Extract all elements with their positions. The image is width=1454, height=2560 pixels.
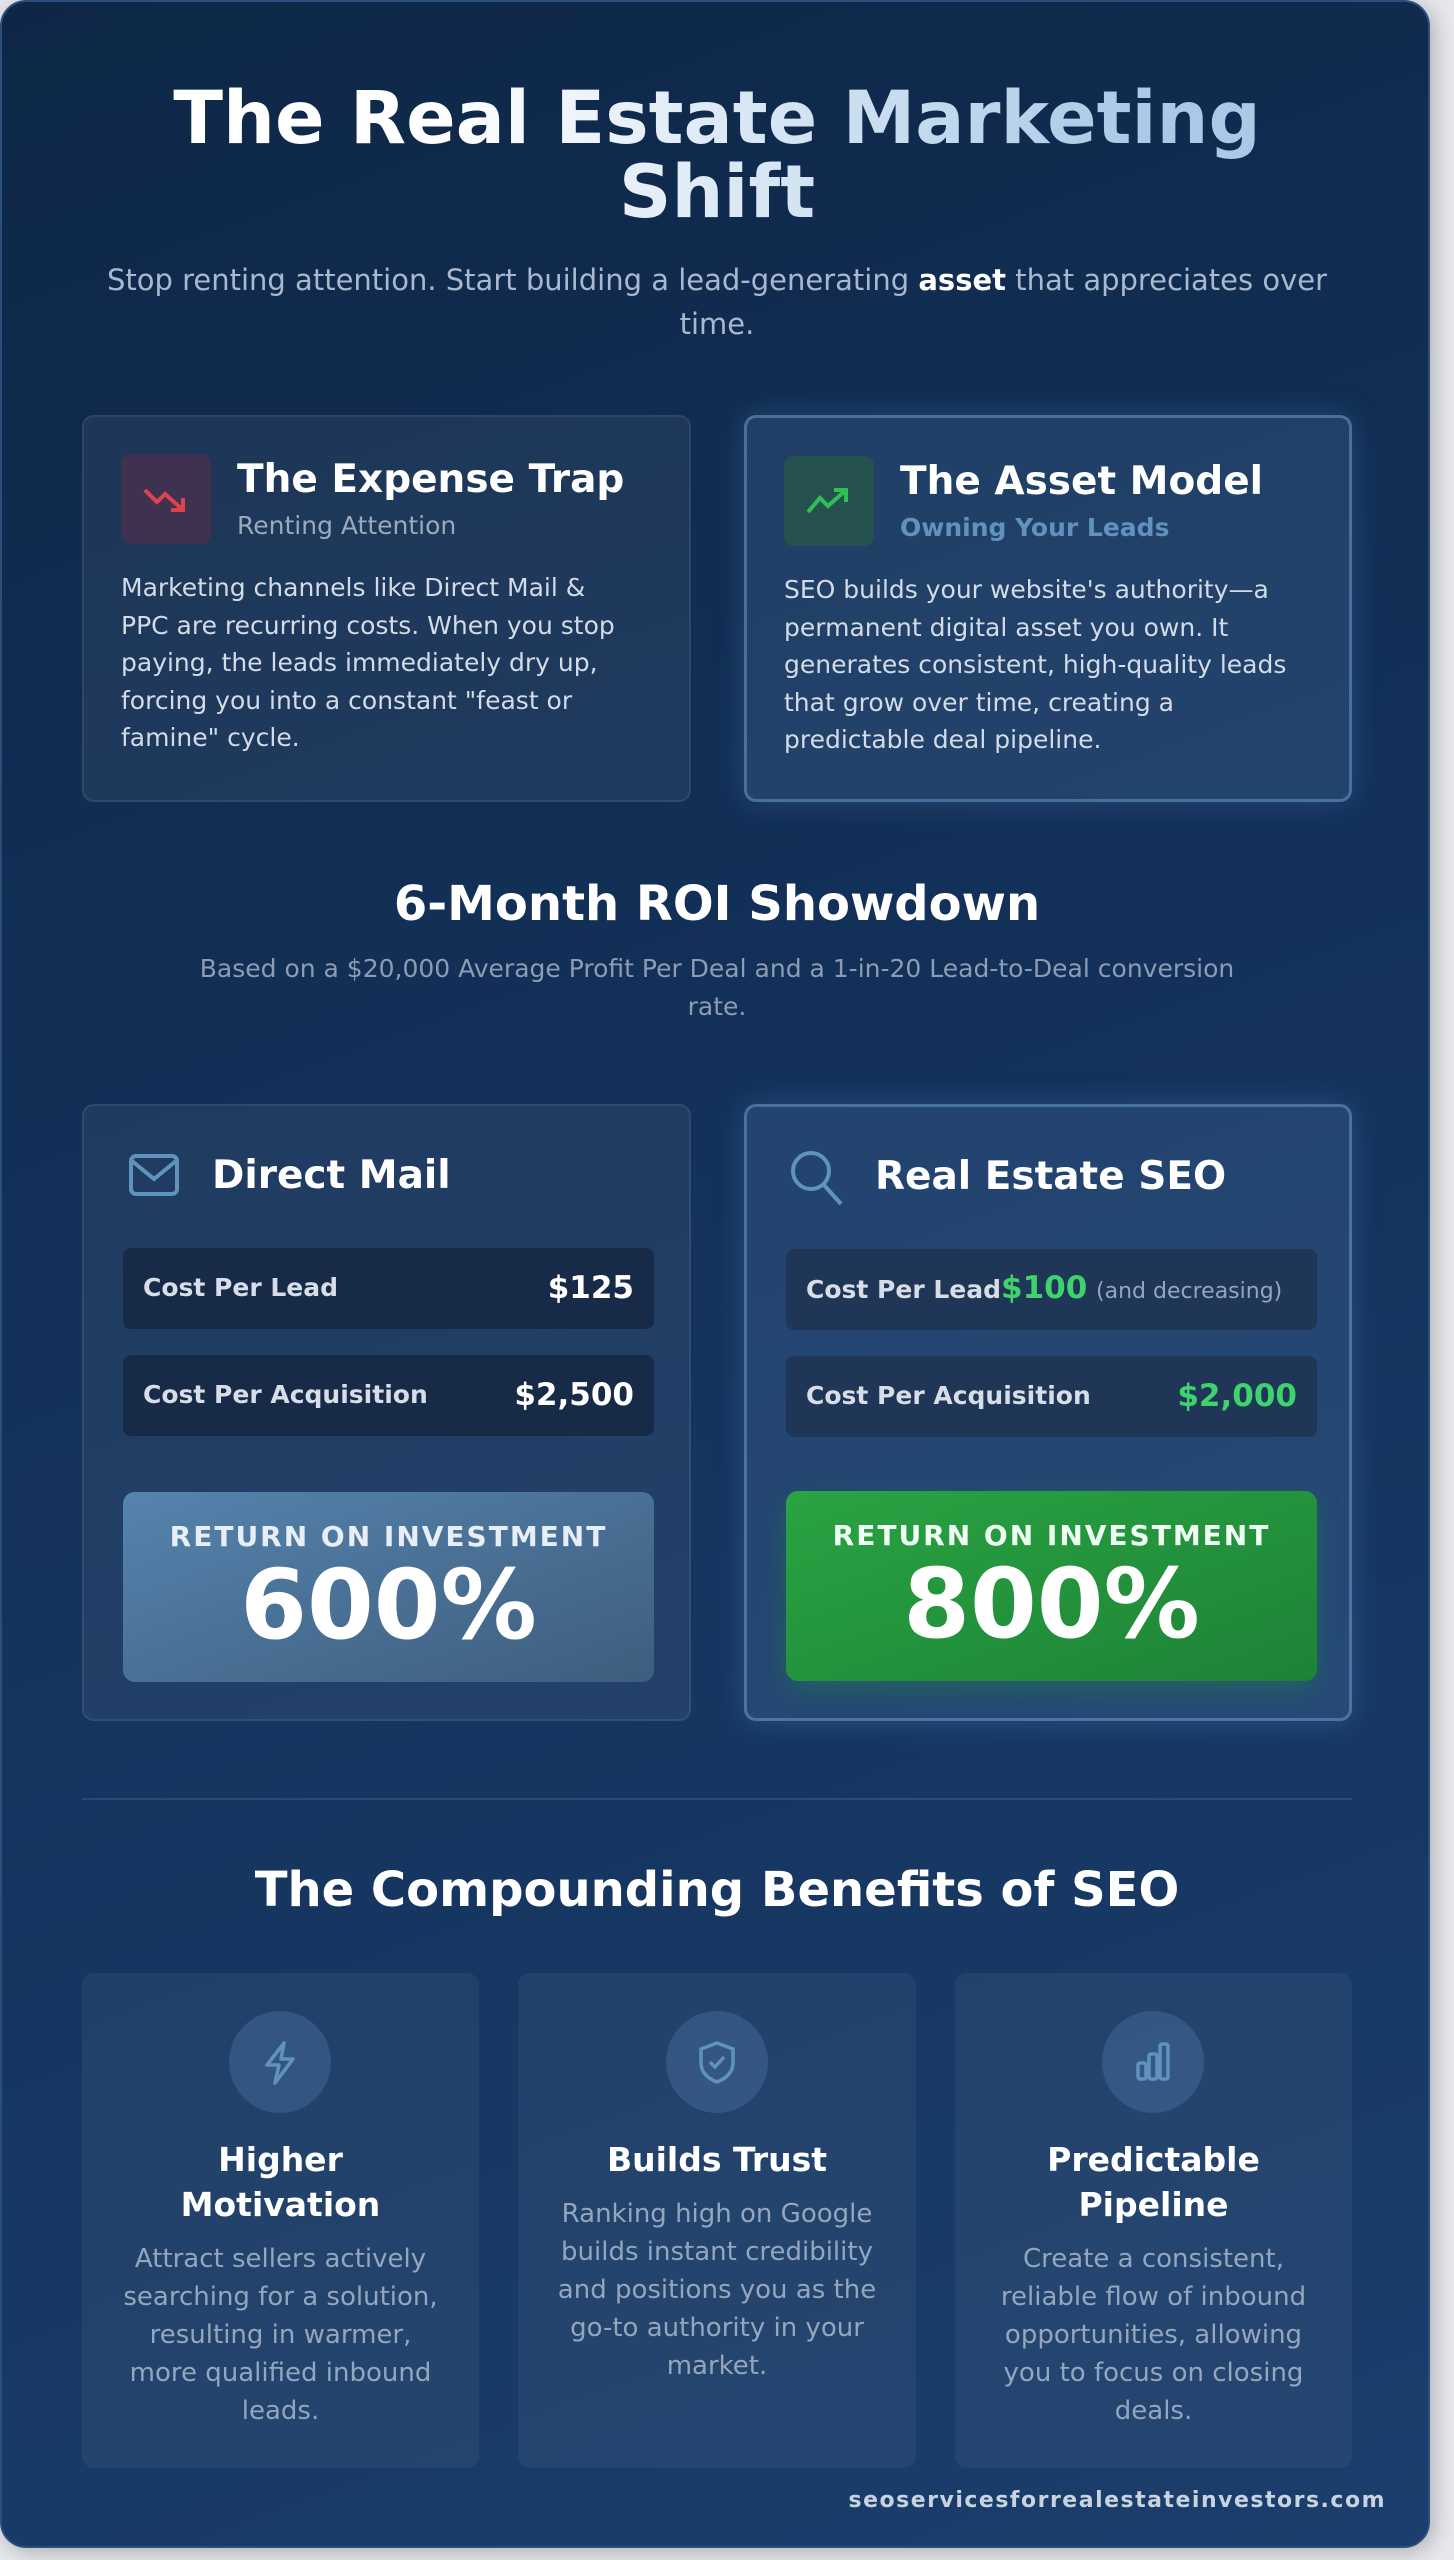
row: CPA: Cost Per Acquisition <box>806 1381 1091 1410</box>
heading: Direct Mail <box>212 1153 451 1198</box>
title <box>2 82 1432 230</box>
panel: real estate SEO <box>744 1104 1352 1721</box>
heading: The Asset Model <box>900 459 1263 504</box>
row: cost per lead: Cost Per Lead$100 (and decreasing) <box>806 1270 1282 1306</box>
ROI box <box>123 1492 654 1682</box>
row: CPA <box>123 1355 654 1436</box>
text: SEO builds your website's authority—a permanent digital asset you own. It generates consistent, high-quality leads that grow over time, creating a predictable deal pipeline. <box>784 575 1286 754</box>
panel: expense trap <box>82 415 691 802</box>
icon: envelope <box>129 1154 179 1196</box>
ROI note: Based on a $20,000 Average Profit Per Deal and a 1-in-20 Lead-to-Deal conversion rate. <box>200 954 1234 1021</box>
icon: trend up <box>784 456 874 546</box>
ROI box: 600% <box>240 1549 537 1661</box>
row: cost per lead <box>123 1248 654 1329</box>
title <box>1047 2140 1260 2224</box>
icon: bar chart <box>1102 2011 1204 2113</box>
benefit: predictable pipeline <box>955 1973 1352 2468</box>
text: Attract sellers actively searching for a solution, resulting in warmer, more qualified inbound leads. <box>123 2244 438 2426</box>
title <box>181 2140 380 2224</box>
icon: trend down <box>121 454 211 544</box>
footer url: seoservicesforrealestateinvestors.com <box>848 2488 1386 2513</box>
text: Marketing channels like Direct Mail & PPC are recurring costs. When you stop paying, the leads immediately dry up, forcing you into a constant "feast or famine" cycle. <box>121 573 615 752</box>
panel: asset model <box>744 415 1352 802</box>
icon: bolt <box>229 2011 331 2113</box>
ROI box: 800% <box>903 1548 1200 1660</box>
panel: direct mail <box>82 1104 691 1721</box>
text: Ranking high on Google builds instant credibility and positions you as the go-to authority in your market. <box>558 2199 876 2381</box>
ROI box <box>786 1491 1317 1681</box>
title: Predictable <box>1047 2140 1260 2179</box>
icon: shield <box>666 2011 768 2113</box>
row: cost per lead: Cost Per Lead <box>143 1273 338 1302</box>
row: CPA <box>786 1356 1317 1437</box>
title: Higher <box>218 2140 343 2179</box>
row: cost per lead: $125 <box>548 1270 634 1306</box>
heading: The Expense Trap <box>237 457 624 502</box>
ROI box: RETURN ON INVESTMENT <box>170 1520 607 1553</box>
subheading: Owning Your Leads <box>900 513 1169 542</box>
benefit: builds trust <box>518 1973 916 2468</box>
row: cost per lead <box>786 1249 1317 1330</box>
ROI box: RETURN ON INVESTMENT <box>833 1519 1270 1552</box>
title: The Real Estate Marketing <box>173 76 1261 161</box>
title: Pipeline <box>1078 2185 1228 2224</box>
heading: Real Estate SEO <box>875 1154 1226 1199</box>
text: Create a consistent, reliable flow of inbound opportunities, allowing you to focus on closing deals. <box>1001 2244 1306 2426</box>
subheading: Renting Attention <box>237 511 456 540</box>
row: CPA: $2,000 <box>1177 1378 1297 1414</box>
heading: ROI showdown: 6-Month ROI Showdown <box>394 876 1040 932</box>
row: CPA: $2,500 <box>514 1377 634 1413</box>
title: Builds Trust <box>607 2140 827 2179</box>
benefit: higher motivation <box>82 1973 479 2468</box>
row: CPA: Cost Per Acquisition <box>143 1380 428 1409</box>
subtitle: Stop renting attention. Start building a lead-generating asset that appreciates over time. <box>107 263 1327 341</box>
icon: search <box>791 1151 842 1206</box>
title: Motivation <box>181 2185 380 2224</box>
title: Shift <box>619 150 815 235</box>
heading: benefits: The Compounding Benefits of SEO <box>255 1862 1179 1918</box>
